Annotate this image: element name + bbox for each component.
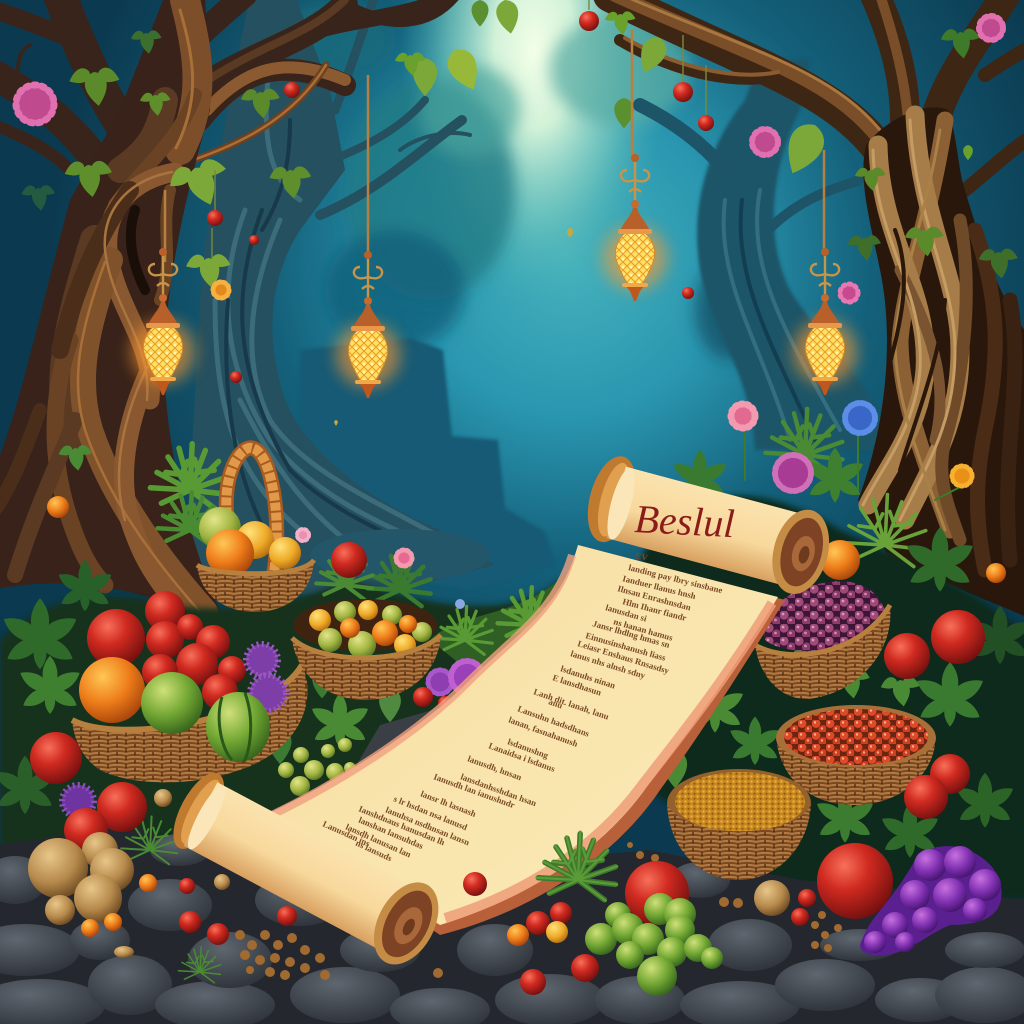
scroll: body text lines: s lr hsdan nsa lanusd <box>392 794 469 832</box>
red bean basket <box>776 705 936 805</box>
scroll: body text lines: Hlm Ihanr fiandr <box>621 596 688 623</box>
lantern centre-left <box>336 75 400 398</box>
rock cliff <box>300 338 555 590</box>
scroll: parchment sheet <box>265 545 785 935</box>
foreground left: tomatoes, purple grapes, onions <box>28 732 297 958</box>
purple berry basket <box>755 582 890 699</box>
scroll: body text lines: Ilnsau Enrashnsdan <box>616 583 692 613</box>
scroll: body text lines: anu <box>547 696 564 711</box>
undergrowth foliage backdrop <box>0 496 1024 900</box>
hanging flowers <box>16 16 1003 302</box>
left background tree <box>180 0 495 600</box>
scroll: body text lines: lanuhsa nsdhnsan lansn <box>384 805 471 847</box>
scroll: body text lines: lansr lh lasnash <box>419 789 478 819</box>
foreground centre: tomatoes and green fruit <box>463 861 723 996</box>
scroll: body text lines: lsdanushng <box>506 736 550 761</box>
foliage: left cluster <box>0 444 227 983</box>
foliage: centre cluster <box>269 551 561 764</box>
scroll: body text lines: lanusdh, hnsan <box>466 753 523 782</box>
lantern centre-right <box>603 30 667 301</box>
scroll: bottom roller <box>161 765 452 975</box>
scroll: body text lines: Ianusdh lan ianushndr <box>432 771 516 810</box>
scattered beans <box>235 842 842 980</box>
stone ground <box>0 705 1024 1024</box>
spice basket <box>667 769 811 880</box>
small loose fruits at tree base <box>47 496 1006 710</box>
left great tree <box>0 0 455 628</box>
scroll: body text lines: Lanh dit. lanah, lanu <box>532 686 610 722</box>
scroll: body text lines: lanus nhs alnsh sdny <box>569 648 647 681</box>
scroll: body text lines: Ianduer llanus hnsh <box>622 573 697 601</box>
meadow flowers <box>297 403 972 694</box>
scroll: body text lines: Leiasr Enshaus Rnsasdsy <box>576 638 671 676</box>
right great tree <box>610 0 1024 620</box>
scroll: body text lines: E lansdhasun <box>551 672 603 698</box>
scroll: body text lines: Lansuhn hadsdhans <box>516 703 591 739</box>
scroll: body text lines: lansdanhsshdan hsan <box>459 771 538 808</box>
scroll: body text lines: Lanaidsa i lsdanus <box>487 740 557 774</box>
scroll: body text lines: Einnusinshanush liass <box>584 630 667 663</box>
scroll: body text lines: Lanusdan ins <box>321 819 372 849</box>
scroll: body text lines: Jansr lhdlng hmas sn <box>591 618 671 650</box>
scroll: body text lines: lansdh lanusan lan <box>344 822 413 860</box>
scroll: body text lines: ns hanan hamus <box>612 616 675 643</box>
olive fruit cluster <box>278 738 356 796</box>
scroll: body text lines: EV <box>635 550 649 563</box>
scroll: body text lines: lsdanuhs ninan <box>559 663 617 691</box>
pine sprig on scroll <box>537 832 617 901</box>
misty tree canopies <box>270 0 765 360</box>
scroll: body text lines: ns lansuds <box>354 838 394 863</box>
scroll: body text lines: lanusdan si <box>604 602 648 624</box>
large fruit basket: tomatoes, orange, melon <box>72 591 308 782</box>
lantern left <box>131 190 195 395</box>
purple grape bunch <box>860 846 1002 955</box>
hanging red berries <box>207 0 714 383</box>
centre basket: citrus and small fruit <box>292 599 441 700</box>
scroll title: Beslul <box>634 496 736 546</box>
foliage: right cluster <box>663 409 1024 858</box>
scroll: body text lines: landing pay lbry sinsbane <box>628 562 724 595</box>
scroll: top roller with title <box>579 451 839 600</box>
lantern right <box>793 150 857 395</box>
right background tree <box>640 60 890 450</box>
hanging leaves and vines <box>20 0 1020 426</box>
basket with handle and yellow fruit <box>197 448 314 612</box>
green fruit cluster <box>585 893 723 996</box>
scroll: body text lines: lanan, fasnahanush <box>507 714 579 749</box>
scroll <box>161 451 839 975</box>
scroll: body text lines <box>321 550 724 863</box>
scroll: body text lines: Ianshdnaus hanusdan lh <box>357 804 446 847</box>
scroll: body text lines: lanshan lansuhdas <box>357 815 425 851</box>
foreground right: tomatoes and grapes <box>754 610 1002 955</box>
